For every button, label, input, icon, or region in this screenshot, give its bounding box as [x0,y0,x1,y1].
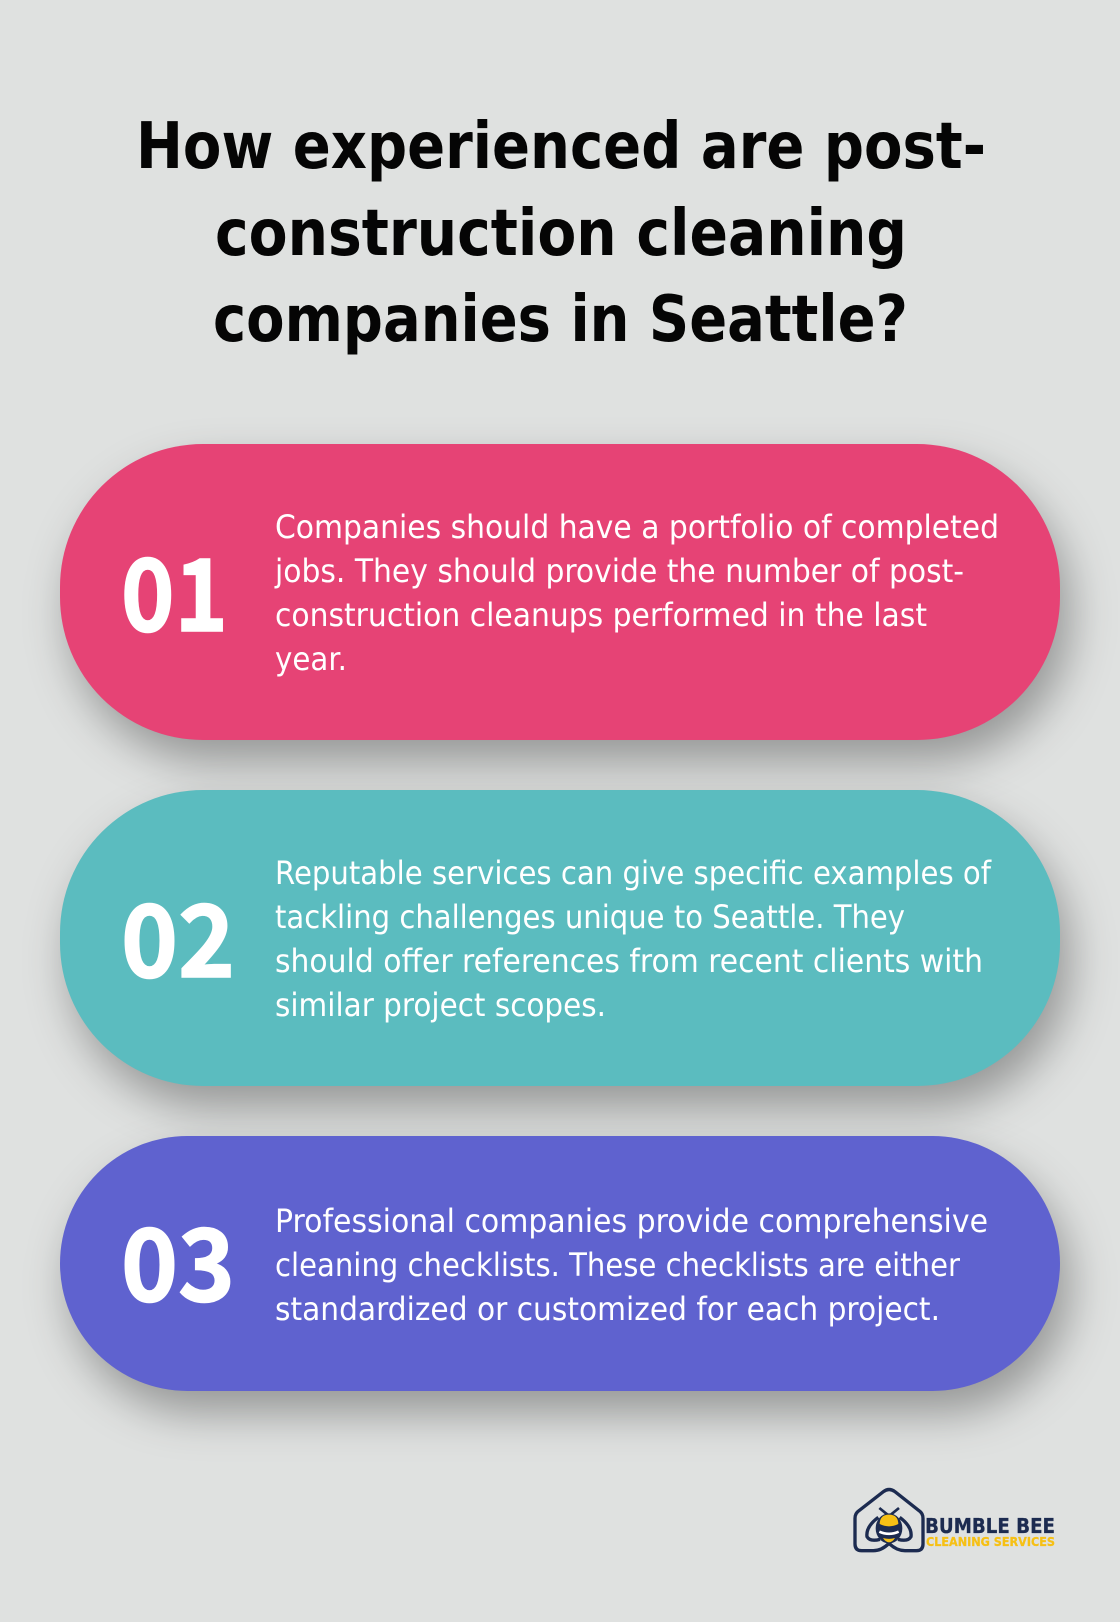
icon: house with bee [855,1489,923,1551]
tagline: CLEANING SERVICES [926,1535,1055,1549]
text block: step 02 [275,854,992,1024]
panel: step 02 [60,790,1070,1108]
title: How experienced are post- [136,110,986,184]
text block: step 03: Professional companies provide comprehensive [275,1202,988,1240]
text block: step 03 [275,1202,988,1328]
text block: step 02: should offer references from recent clients with [275,942,983,980]
text block: step 02: tackling challenges unique to Seattle. They [275,898,905,936]
text block: step 01: Companies should have a portfolio of completed [275,508,999,546]
title: construction cleaning [215,197,907,271]
text block: step 02: similar project scopes. [275,986,606,1024]
panel: step 03 [60,1136,1070,1413]
text block: step 01: jobs. They should provide the number of post- [274,552,964,590]
panel: step 01 [60,444,1070,762]
text block: step 02: Reputable services can give specific examples of [275,854,992,892]
text block: step 03: standardized or customized for each project. [275,1290,940,1328]
number 01: 01 [121,515,228,660]
text block: step 01: year. [275,640,347,678]
number 02: 02 [121,861,235,1006]
wordmark: BUMBLE BEE [925,1514,1055,1538]
number 03: 03 [121,1185,235,1330]
title: companies in Seattle? [213,283,908,357]
text block: step 03: cleaning checklists. These checklists are either [275,1246,961,1284]
logo: Bumble Bee Cleaning Services [855,1489,1055,1551]
text block: step 01: construction cleanups performed in the last [275,596,927,634]
text block: step 01 [274,508,999,678]
title [136,110,986,357]
